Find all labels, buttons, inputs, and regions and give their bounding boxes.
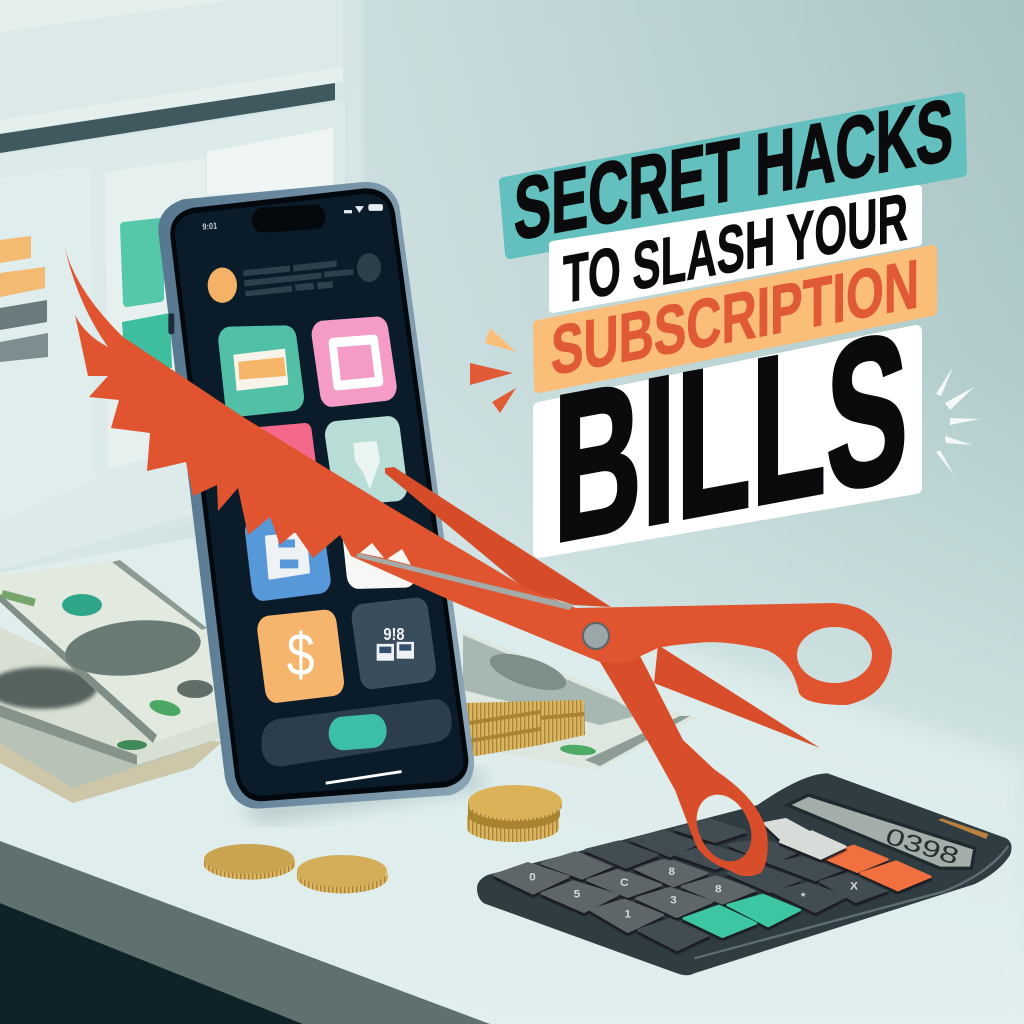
bottom nav bar — [261, 699, 452, 766]
jagged cut ribbon, lower blade and handle with ring — [64, 245, 892, 705]
flat coins — [204, 844, 388, 894]
key glyphs: 3 — [670, 894, 677, 906]
key glyphs — [529, 865, 858, 920]
green keys — [684, 895, 800, 937]
calculator body — [477, 773, 1012, 975]
teal band — [504, 97, 962, 254]
money stack left — [0, 560, 222, 803]
status time: 9:01 — [202, 221, 218, 232]
header button — [357, 253, 381, 282]
app icon: dollar — [269, 620, 332, 689]
white band — [553, 189, 918, 309]
upper blade — [385, 467, 611, 607]
title block — [504, 80, 962, 587]
dark keys — [586, 819, 887, 950]
display digits: 0398 — [882, 823, 962, 870]
key glyphs: 8 — [715, 883, 722, 896]
bill portrait — [63, 614, 203, 682]
gray keys — [495, 853, 756, 932]
app icon: hot pink — [260, 431, 310, 475]
key glyphs: 5 — [574, 888, 581, 900]
lower spike blade — [654, 645, 820, 748]
key glyphs: X — [850, 880, 858, 892]
app icon: mint — [337, 430, 396, 491]
phone body — [158, 182, 474, 809]
dynamic island — [252, 204, 326, 233]
key glyphs: C — [620, 876, 629, 889]
header placeholder lines — [243, 260, 353, 296]
front rim highlight — [694, 846, 1008, 958]
spark marks right — [936, 367, 980, 475]
money stack right — [463, 630, 697, 770]
nav pill — [343, 731, 373, 733]
orange band — [538, 250, 932, 388]
background shelf and papers — [0, 0, 345, 570]
scissors with cut ribbon — [64, 245, 892, 876]
app icon: pink square — [323, 331, 385, 393]
side buttons — [168, 313, 174, 334]
phone screen — [173, 191, 466, 798]
pivot screw — [583, 623, 609, 649]
profile avatar — [208, 268, 237, 303]
coins behind phone — [463, 700, 585, 757]
key glyphs: 8 — [668, 865, 676, 878]
home indicator — [326, 772, 402, 783]
key glyphs: 1 — [624, 908, 632, 920]
desk — [0, 515, 1024, 1024]
coin stack front — [467, 785, 562, 842]
handle two with ring — [600, 652, 768, 876]
light keys — [765, 819, 845, 858]
status icons — [344, 204, 383, 213]
key glyphs: 0 — [529, 871, 536, 884]
app icon: dark receipt — [363, 612, 424, 675]
app icon: blue save — [257, 527, 319, 587]
solar strip — [938, 818, 988, 839]
calculator display — [787, 795, 975, 868]
orange keys — [821, 846, 930, 890]
spark marks left — [470, 328, 516, 413]
calculator — [477, 773, 1012, 975]
steel edge — [356, 553, 574, 610]
app icon: white — [353, 527, 405, 575]
key glyphs: * — [801, 890, 806, 903]
phone — [158, 182, 474, 809]
white icon peaks between ribbon and blade — [360, 543, 411, 565]
phone shadow — [240, 770, 490, 822]
app icon: dollar: $ — [287, 620, 315, 688]
app icon: card — [230, 339, 292, 403]
bills band — [539, 331, 916, 552]
app icon: dark receipt: 9!8 — [383, 625, 405, 644]
